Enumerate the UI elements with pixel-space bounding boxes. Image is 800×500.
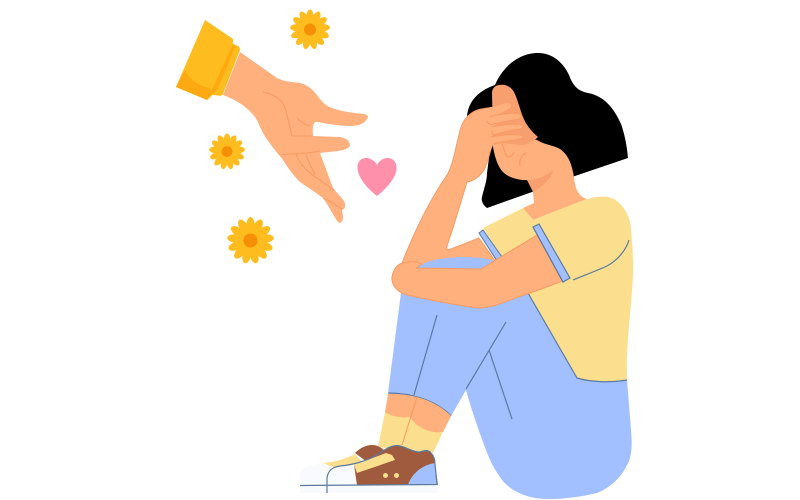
finger 2 xyxy=(484,113,521,125)
front shoe toe xyxy=(326,465,357,485)
back shoe toe xyxy=(300,463,332,485)
flower: bottom xyxy=(227,217,274,264)
neck shadow xyxy=(527,170,553,192)
lace panel xyxy=(354,453,395,473)
shoe outline xyxy=(300,446,437,493)
cheek line xyxy=(520,153,526,166)
finger 4 xyxy=(491,135,523,144)
eyelets xyxy=(383,473,388,478)
cuff shade xyxy=(176,70,212,100)
forearm raised to head xyxy=(402,106,500,275)
back shoe upper xyxy=(355,445,386,462)
nose xyxy=(502,143,514,157)
ankles xyxy=(385,394,451,433)
sleeve cuff xyxy=(533,224,570,282)
flower: top xyxy=(290,10,330,50)
sleeve cuff xyxy=(176,20,233,100)
sneakers xyxy=(300,445,438,493)
front shoe upper xyxy=(354,446,438,485)
socks xyxy=(378,412,443,453)
forehead xyxy=(492,85,538,145)
ground shadow xyxy=(300,485,438,493)
jeans xyxy=(388,275,632,499)
heel panel xyxy=(408,463,437,485)
palm cover xyxy=(470,112,494,170)
finger 1 xyxy=(478,103,511,120)
helping hand xyxy=(176,20,368,223)
jeans seam lines xyxy=(388,315,512,419)
neck and face xyxy=(493,130,587,220)
sleeve inner band xyxy=(212,44,240,96)
face details xyxy=(502,143,526,166)
sleeve dark strip xyxy=(211,44,236,95)
flower: middle xyxy=(209,134,245,170)
knee xyxy=(416,257,495,269)
forearm across knee xyxy=(392,235,562,308)
fingers xyxy=(478,103,523,144)
small sleeve cuff xyxy=(479,230,502,261)
hair xyxy=(467,53,628,208)
shirt xyxy=(483,197,633,382)
hand creases xyxy=(263,92,342,209)
hand skin xyxy=(223,52,368,223)
finger 3 xyxy=(490,124,523,135)
heart xyxy=(357,158,397,196)
woman xyxy=(378,53,633,499)
